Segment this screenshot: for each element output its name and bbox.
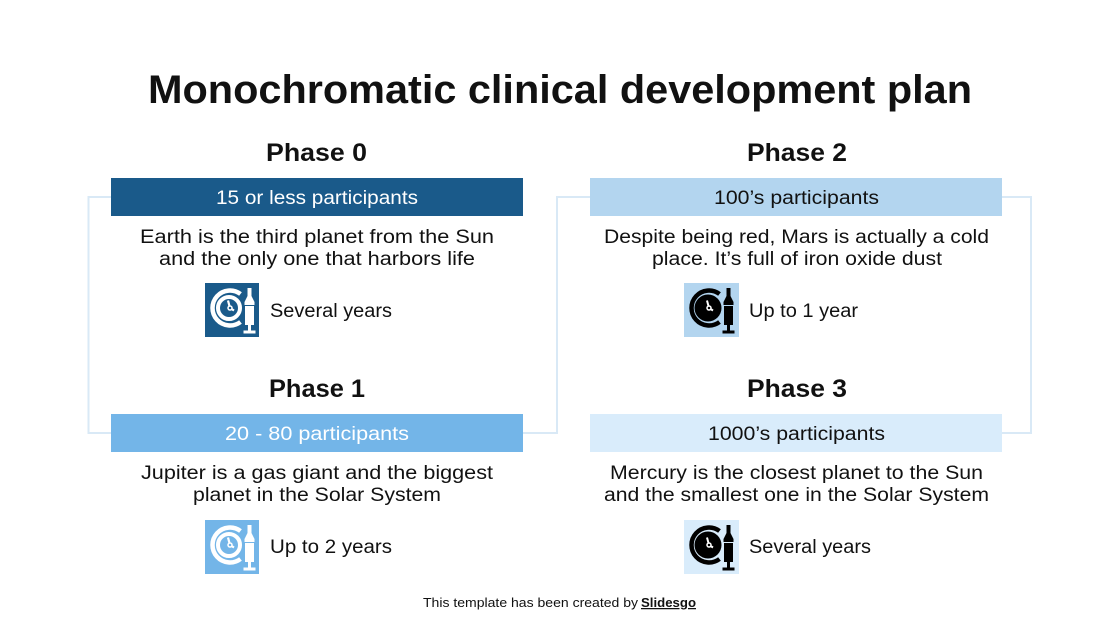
phase 3 participants bar: 1000’s participants: [708, 424, 885, 445]
icon: clock and syringe: [684, 520, 739, 574]
phase 2 heading: Phase 2: [747, 139, 847, 167]
footer credit: Slidesgo: [641, 596, 696, 610]
icon: clock and syringe: [205, 520, 259, 574]
phase 0 description: [140, 227, 494, 270]
phase 0 heading: Phase 0: [266, 139, 367, 167]
phase 3 description: [604, 463, 989, 506]
icon: clock and syringe: [205, 283, 259, 337]
phase 0 description: Earth is the third planet from the Sun: [140, 227, 494, 248]
phase 3 participants bar: [590, 414, 1002, 452]
panel: phase 1: [111, 375, 523, 574]
phase 3 description: and the smallest one in the Solar System: [604, 485, 989, 506]
phase 1 heading: Phase 1: [269, 375, 365, 403]
phase 1 description: [141, 463, 494, 506]
phase 1 participants bar: 20 - 80 participants: [225, 424, 409, 445]
phase 3 heading: Phase 3: [747, 375, 847, 403]
connector: phase 0 to phase 1: [88, 197, 111, 433]
phase 0 description: and the only one that harbors life: [159, 249, 475, 270]
footer credit: This template has been created by: [423, 596, 639, 610]
duration: Several years: [749, 537, 871, 558]
phase 1 description: Jupiter is a gas giant and the biggest: [141, 463, 494, 484]
phase 2 participants bar: 100’s participants: [714, 188, 879, 209]
phase 2 description: [604, 227, 989, 270]
panel: phase 0: [111, 139, 523, 337]
duration: Several years: [270, 301, 392, 322]
panel: phase 2: [590, 139, 1002, 337]
phase 0 participants bar: [111, 178, 523, 216]
icon: clock and syringe: [684, 283, 739, 337]
connector: phase 1 to phase 2: [523, 197, 590, 433]
title: Monochromatic clinical development plan: [148, 68, 972, 112]
duration: Up to 2 years: [270, 537, 392, 558]
phase 2 description: place. It’s full of iron oxide dust: [652, 249, 943, 270]
connector: phase 2 to phase 3: [1002, 197, 1031, 433]
panel: phase 3: [590, 375, 1002, 574]
phase 0 participants bar: 15 or less participants: [216, 188, 418, 209]
phase 3 description: Mercury is the closest planet to the Sun: [610, 463, 983, 484]
duration: Up to 1 year: [749, 301, 859, 322]
phase 1 description: planet in the Solar System: [193, 485, 441, 506]
phase 1 participants bar: [111, 414, 523, 452]
phase 2 description: Despite being red, Mars is actually a cold: [604, 227, 989, 248]
phase 2 participants bar: [590, 178, 1002, 216]
